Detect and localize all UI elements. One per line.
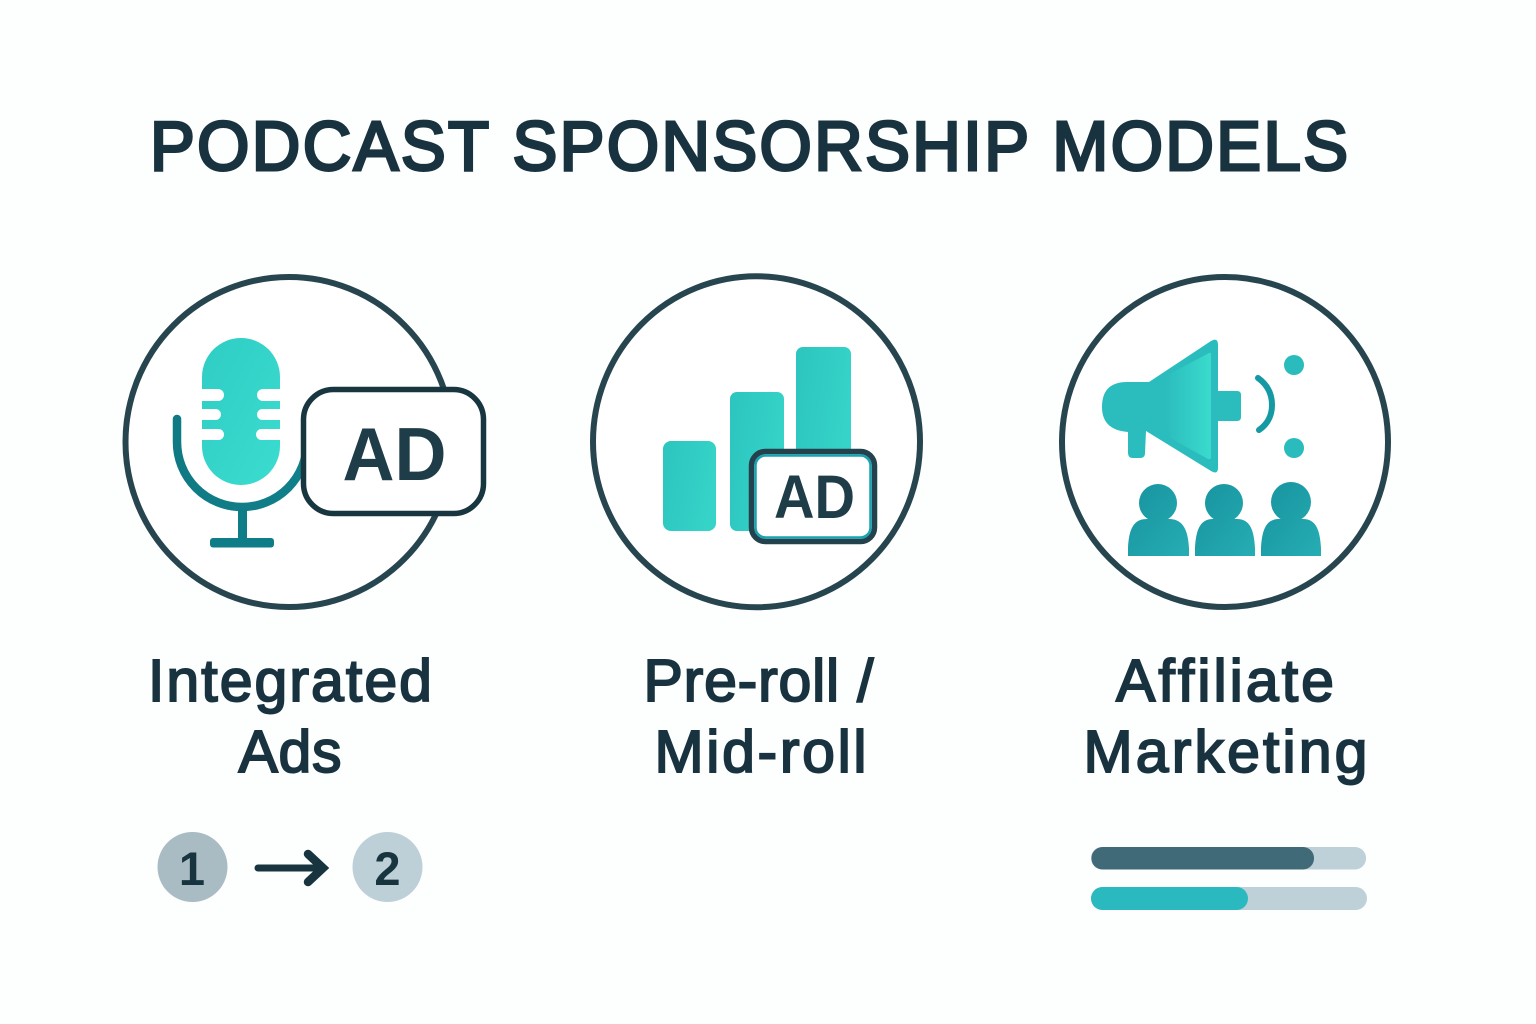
panel: pre-roll / mid-roll [593,276,920,785]
label: affiliate marketing: Affiliate [1116,648,1334,714]
ad badge with ring [752,452,874,542]
label: integrated ads [148,648,432,785]
icon ring: integrated ads [126,277,452,607]
label: integrated ads: Integrated [148,648,432,714]
icon: megaphone [1102,340,1304,472]
step sequence 1 to 2 [158,832,422,902]
step sequence 1 to 2: 2 [374,842,401,895]
step sequence 1 to 2: 1 [179,842,205,895]
icon ring: affiliate [1062,277,1388,607]
icon ring: pre-roll [593,276,920,607]
label: pre-roll / mid-roll: Pre-roll / [644,648,874,714]
icon: microphone [177,338,307,548]
label: pre-roll / mid-roll [644,648,874,785]
label: affiliate marketing [1084,648,1368,785]
bar chart icon [663,347,851,531]
progress bars [1091,847,1367,910]
ad badge with ring: AD [774,463,855,531]
label: affiliate marketing: Marketing [1084,719,1368,785]
title: PODCAST SPONSORSHIP MODELS [150,107,1348,185]
icon: audience [1128,482,1321,556]
label: pre-roll / mid-roll: Mid-roll [654,719,866,785]
ad badge [304,390,484,514]
panel: integrated ads [126,277,484,902]
panel: affiliate marketing [1062,277,1388,910]
label: integrated ads: Ads [238,719,342,785]
ad badge: AD [342,412,446,496]
